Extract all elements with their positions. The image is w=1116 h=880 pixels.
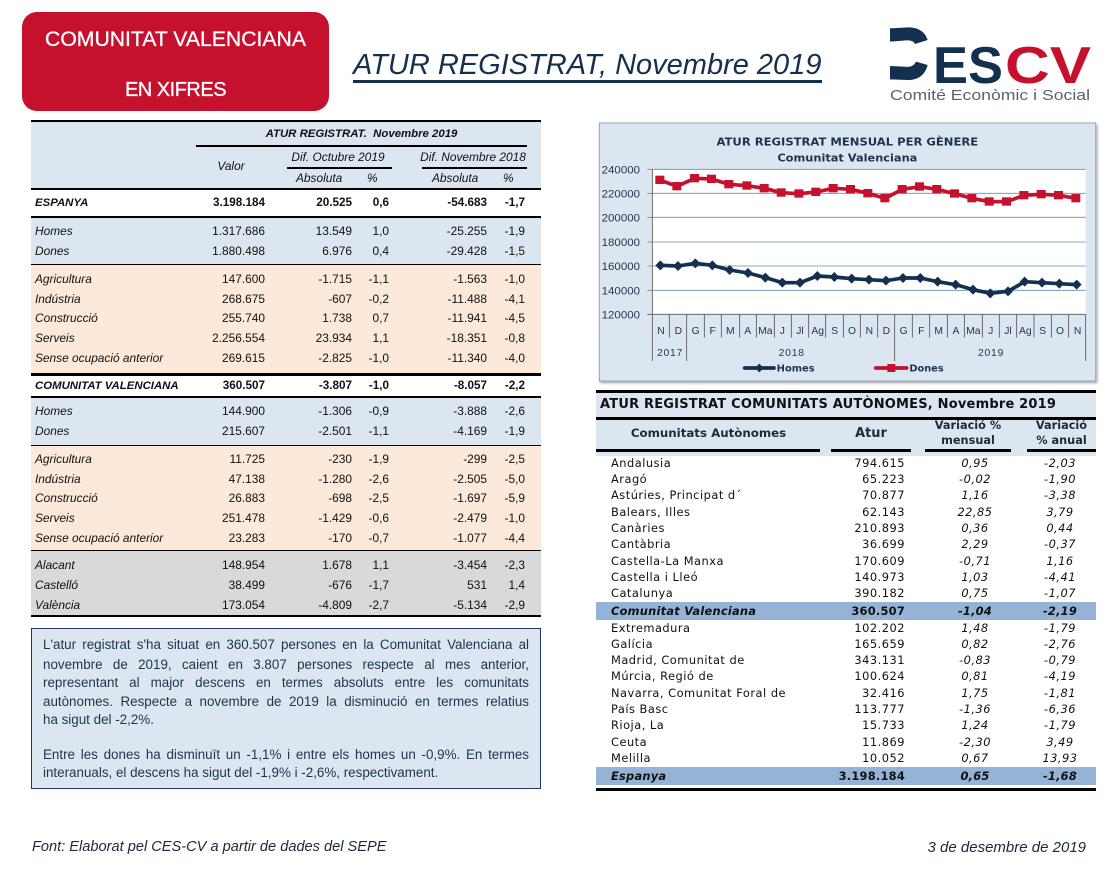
- panel: left table: Agricultura: [35, 272, 92, 286]
- right table rows: 22,85: [957, 505, 993, 519]
- x axis labels: F: [918, 326, 924, 337]
- left table header: [31, 120, 541, 190]
- panel: left table: -4,0: [504, 351, 525, 365]
- right table rows: 0,95: [961, 456, 989, 470]
- right table rows: 100.624: [854, 669, 905, 683]
- right table rows: -2,19: [1043, 604, 1077, 618]
- right table rows: 1,16: [961, 488, 989, 502]
- right table rows: -1,81: [1044, 686, 1076, 700]
- x axis labels: 2019: [978, 348, 1004, 359]
- x axis labels: 2017: [657, 348, 683, 359]
- panel: left table: -3.454: [453, 558, 487, 572]
- right table rows: 0,44: [1046, 521, 1074, 535]
- right table rows: -1,07: [1044, 586, 1076, 600]
- panel: left table: 148.954: [222, 558, 265, 572]
- logo: CESCV: ES: [933, 37, 1003, 95]
- panel: left table: -1,0: [368, 351, 389, 365]
- text block: paragraf 2: interanuals, el descens ha sigut del -1,9% i -2,6%, respectivament.: [43, 765, 438, 780]
- text block: paragraf 2: [43, 747, 529, 780]
- right table rows: -0,71: [959, 554, 991, 568]
- panel: left table: -2,6: [504, 404, 525, 418]
- legend: Dones: [909, 364, 944, 375]
- panel: left table: -1.429: [318, 511, 352, 525]
- panel: left table: -2,5: [368, 491, 389, 505]
- x axis labels: Jl: [796, 326, 804, 337]
- right table rows: -2,76: [1044, 637, 1076, 651]
- panel: left table: -4.809: [318, 598, 352, 612]
- x axis labels: N: [1074, 326, 1081, 337]
- right table rows: -4,19: [1044, 669, 1076, 683]
- right table rows: 15.733: [862, 718, 905, 732]
- x axis labels: [657, 326, 1081, 359]
- right table rows: 170.609: [854, 554, 905, 568]
- right table rows: Aragó: [611, 472, 647, 486]
- panel: left table: Indústria: [35, 472, 81, 486]
- panel: left table: -4.169: [453, 424, 487, 438]
- left table header: Absoluta: [296, 171, 342, 185]
- panel: left table: 144.900: [222, 404, 265, 418]
- panel: left table: 268.675: [222, 292, 265, 306]
- right table rows: 13,93: [1042, 751, 1078, 765]
- right table header: Variació: [1036, 419, 1087, 432]
- panel: left table: Sense ocupació anterior: [35, 351, 163, 365]
- panel: left table: -1,0: [504, 272, 525, 286]
- panel: left table: -1.563: [453, 272, 487, 286]
- x axis labels: S: [1039, 326, 1046, 337]
- logo: CESCV: CV: [1005, 37, 1091, 95]
- chart: atur registrat mensual per gènere: [598, 122, 1099, 385]
- right table rows: Espanya: [611, 769, 666, 783]
- panel: left table: -11.941: [448, 311, 487, 325]
- panel: left table: Sense ocupació anterior: [35, 531, 163, 545]
- right table rows: 1,75: [961, 686, 989, 700]
- panel: left table: -5,0: [504, 472, 525, 486]
- right table header: Atur: [855, 426, 887, 441]
- x axis labels: F: [710, 326, 716, 337]
- row: Espanya: [35, 196, 525, 209]
- panel: left table: 1.880.498: [212, 244, 265, 258]
- panel: left table: -5,9: [504, 491, 525, 505]
- panel: left table: -1.077: [453, 531, 487, 545]
- right table rows: 210.893: [854, 521, 905, 535]
- logo: CESCV: [890, 27, 1091, 104]
- chart title: [716, 136, 978, 165]
- panel: left table: -25.255: [447, 224, 487, 238]
- right table rows: 1,16: [1046, 554, 1074, 568]
- right table rows: -0,02: [959, 472, 991, 486]
- row: Comunitat Valenciana: -3.807: [319, 379, 352, 392]
- row: Comunitat Valenciana: -2,2: [505, 379, 525, 392]
- panel: left table: -0,2: [368, 292, 389, 306]
- row: Comunitat Valenciana: -1,0: [369, 379, 389, 392]
- x axis labels: Jl: [1004, 326, 1012, 337]
- right table rows: País Basc: [611, 702, 669, 716]
- panel: left table: -0,6: [368, 511, 389, 525]
- x axis labels: D: [675, 326, 682, 337]
- panel: left table: Dones: [35, 424, 69, 438]
- right table rows: 794.615: [854, 456, 905, 470]
- x axis labels: D: [883, 326, 890, 337]
- right table rows: 62.143: [862, 505, 905, 519]
- panel: left table: -11.340: [448, 351, 487, 365]
- x axis labels: Ma: [966, 326, 981, 337]
- row: Comunitat Valenciana: [35, 379, 525, 392]
- panel: left table: -1,1: [368, 272, 389, 286]
- rows: Comunitat Valenciana per sector: [31, 446, 541, 551]
- panel: left table: -0,9: [368, 404, 389, 418]
- panel: left table: -2.505: [453, 472, 487, 486]
- x axis labels: S: [831, 326, 838, 337]
- panel: left table: -3.888: [453, 404, 487, 418]
- right table rows: Cantàbria: [611, 537, 671, 551]
- legend: [745, 364, 944, 375]
- x axis labels: N: [657, 326, 665, 337]
- row: Espanya: -1,7: [505, 196, 525, 209]
- right table rows: Navarra, Comunitat Foral de: [611, 686, 786, 700]
- x axis labels: J: [988, 326, 993, 337]
- right table rows: -3,38: [1044, 488, 1076, 502]
- panel: left table: -1,9: [368, 452, 389, 466]
- x axis labels: A: [744, 326, 751, 337]
- panel: left table: Construcció: [35, 491, 98, 505]
- right table rows: Múrcia, Regió de: [611, 669, 714, 683]
- row: Comunitat Valenciana: 360.507: [223, 379, 265, 392]
- panel: left table: -230: [328, 452, 352, 466]
- panel: left table: -18.351: [447, 331, 487, 345]
- series: Homes: [655, 258, 1082, 298]
- right table rows: 165.659: [854, 637, 905, 651]
- x axis labels: G: [692, 326, 700, 337]
- badge: Comunitat Valenciana en xifres: COMUNITAT VALENCIANA: [45, 28, 306, 51]
- right table rows: 3,79: [1046, 505, 1074, 519]
- right table rows: Melilla: [611, 751, 651, 765]
- panel: left table: València: [35, 598, 80, 612]
- panel: left table: -2.479: [453, 511, 487, 525]
- left table header: Absoluta: [432, 171, 478, 185]
- panel: left table: -2,5: [504, 452, 525, 466]
- panel: left table: 6.976: [322, 244, 352, 258]
- panel: left table: 38.499: [229, 578, 265, 592]
- panel: left table: 13.549: [316, 224, 352, 238]
- panel: left table: -1,7: [368, 578, 389, 592]
- right table rows: 65.223: [862, 472, 905, 486]
- left table header: Valor: [217, 159, 245, 173]
- right table rows: Ceuta: [611, 735, 647, 749]
- right table rows: Extremadura: [611, 621, 691, 635]
- panel: left table: Homes: [35, 404, 73, 418]
- right table header: Comunitats Autònomes: [631, 426, 786, 440]
- left table header: %: [367, 171, 378, 185]
- panel: left table: Serveis: [35, 511, 75, 525]
- panel: left table: -4,4: [504, 531, 525, 545]
- footer: data: 3 de desembre de 2019: [928, 839, 1086, 856]
- x axis labels: O: [848, 326, 856, 337]
- right table rows: Comunitat Valenciana: [611, 604, 756, 618]
- text block: paragraf 1: L'atur registrat s'ha situat en 360.507 persones en la Comunitat Valenciana al: [43, 637, 529, 652]
- logo: CESCV: Comité Econòmic i Social: [890, 87, 1090, 104]
- panel: left table: 2.256.554: [212, 331, 265, 345]
- right table rows: -0,37: [1044, 537, 1076, 551]
- title: ATUR REGISTRAT, Novembre 2019: [353, 49, 821, 81]
- rows: Espanya per gènere: [31, 218, 541, 265]
- right table rows: 0,67: [961, 751, 989, 765]
- chart title: Comunitat Valenciana: [777, 153, 917, 165]
- right table rows: Astúries, Principat d´: [611, 488, 742, 502]
- panel: left table: 1.317.686: [212, 224, 265, 238]
- row: Espanya: 3.198.184: [213, 196, 265, 209]
- right table rows: Madrid, Comunitat de: [611, 653, 745, 667]
- right table rows: 10.052: [862, 751, 905, 765]
- text block: paragraf 1: novembre de 2019, caient en 3.807 persones respecte al mes anterior,: [43, 657, 529, 672]
- panel: left table: -4,5: [504, 311, 525, 325]
- panel: left table: 26.883: [229, 491, 265, 505]
- row: Espanya: ESPANYA: [35, 197, 88, 209]
- panel: left table: -2,6: [368, 472, 389, 486]
- right table rows: Canàries: [611, 521, 665, 535]
- right table rows: 390.182: [854, 586, 905, 600]
- badge: Comunitat Valenciana en xifres: EN XIFRES: [125, 79, 226, 101]
- right table rows: 343.131: [854, 653, 905, 667]
- y axis labels: 220000: [602, 188, 640, 200]
- right table rows: Rioja, La: [611, 718, 664, 732]
- right table rows: -1,68: [1043, 769, 1077, 783]
- text block: paragraf 1: representant al major descens en termes absoluts entre les comunitats: [43, 675, 529, 690]
- x axis labels: M: [934, 326, 943, 337]
- right table rows: 11.869: [862, 735, 905, 749]
- left table header: Dif. Octubre 2019: [291, 150, 385, 164]
- right table header: % anual: [1036, 434, 1087, 447]
- text box: comentari: [31, 628, 541, 789]
- y axis labels: 140000: [602, 285, 640, 297]
- panel: left table: -607: [328, 292, 352, 306]
- right table rows: Balears, Illes: [611, 505, 690, 519]
- right table rows: -4,41: [1044, 570, 1076, 584]
- right table rows: -1,79: [1044, 718, 1076, 732]
- panel: left table: -2,3: [504, 558, 525, 572]
- panel: left table: Alacant: [35, 558, 75, 572]
- panel: left table: Serveis: [35, 331, 75, 345]
- x axis labels: N: [866, 326, 873, 337]
- right table rows: 0,36: [961, 521, 989, 535]
- panel: left table: 1,4: [508, 578, 525, 592]
- row: Espanya: 20.525: [316, 196, 352, 209]
- right table header: ATUR REGISTRAT COMUNITATS AUTÒNOMES, Novembre 2019: [600, 397, 1056, 412]
- y axis labels: 180000: [602, 237, 640, 249]
- right table rows: 360.507: [851, 604, 905, 618]
- x axis labels: M: [726, 326, 735, 337]
- right table rows: 140.973: [854, 570, 905, 584]
- rows: Comunitat Valenciana per gènere: [31, 398, 541, 446]
- right table rows: 113.777: [854, 702, 905, 716]
- right table rows: Castella-La Manxa: [611, 554, 724, 568]
- right table header: mensual: [941, 434, 995, 447]
- panel: left table: 23.934: [316, 331, 352, 345]
- right table rows: 36.699: [862, 537, 905, 551]
- panel: left table: -2.501: [318, 424, 352, 438]
- panel: left table: Agricultura: [35, 452, 92, 466]
- panel: left table: -1.280: [318, 472, 352, 486]
- right table rows: -0,79: [1044, 653, 1076, 667]
- panel: left table: 0,7: [372, 311, 389, 325]
- footer: font: Font: Elaborat pel CES-CV a partir de dades del SEPE: [32, 839, 386, 855]
- right table rows: 3.198.184: [839, 769, 905, 783]
- plot area: [647, 169, 1086, 361]
- left table header: Dif. Novembre 2018: [420, 150, 526, 164]
- right table rows: 1,24: [961, 718, 989, 732]
- x axis labels: A: [953, 326, 960, 337]
- panel: left table: -2,7: [368, 598, 389, 612]
- panel: left table: -11.488: [448, 292, 487, 306]
- panel: left table: 0,4: [372, 244, 389, 258]
- right table rows: 2,29: [961, 537, 989, 551]
- x axis labels: O: [1056, 326, 1064, 337]
- panel: left table: 11.725: [230, 452, 265, 466]
- panel: left table: -0,7: [368, 531, 389, 545]
- rows: Espanya per sector: [31, 265, 541, 373]
- y axis labels: [602, 164, 640, 321]
- right table rows: 0,75: [961, 586, 989, 600]
- panel: left table: Construcció: [35, 311, 98, 325]
- row: Comunitat Valenciana: -8.057: [454, 379, 487, 392]
- panel: left table: [31, 120, 541, 617]
- panel: left table: 1,1: [372, 331, 389, 345]
- panel: left table: 1.738: [322, 311, 352, 325]
- left table header: %: [503, 171, 514, 185]
- panel: left table: 255.740: [222, 311, 265, 325]
- right table rows: 32.416: [862, 686, 905, 700]
- right table rows: 0,81: [961, 669, 989, 683]
- panel: left table: -1,0: [504, 511, 525, 525]
- right table rows: 70.877: [862, 488, 905, 502]
- panel: left table: -5.134: [453, 598, 487, 612]
- right table rows: -6,36: [1044, 702, 1076, 716]
- text block: paragraf 1: [43, 637, 529, 727]
- right table rows: 0,65: [960, 769, 990, 783]
- legend: Homes: [777, 364, 815, 375]
- panel: left table: 531: [467, 578, 487, 592]
- y axis labels: 160000: [602, 261, 640, 273]
- x axis labels: G: [900, 326, 908, 337]
- x axis labels: Ag: [1019, 326, 1032, 337]
- x axis labels: J: [780, 326, 785, 337]
- panel: left table: Homes: [35, 224, 73, 238]
- row: Comunitat Valenciana: COMUNITAT VALENCIANA: [35, 380, 179, 392]
- panel: left table: -1,1: [368, 424, 389, 438]
- panel: left table: 1.678: [322, 558, 352, 572]
- panel: left table: 215.607: [222, 424, 265, 438]
- panel: left table: -676: [328, 578, 352, 592]
- row: Espanya: -54.683: [447, 196, 487, 209]
- x axis labels: Ma: [758, 326, 773, 337]
- x axis labels: Ag: [811, 326, 824, 337]
- panel: left table: 173.054: [222, 598, 265, 612]
- text block: paragraf 2: Entre les dones ha disminuït un -1,1% i entre els homes un -0,9%. En termes: [43, 747, 529, 762]
- panel: left table: -4,1: [504, 292, 525, 306]
- panel: left table: 147.600: [222, 272, 265, 286]
- text block: paragraf 1: ha sigut del -2,2%.: [43, 712, 154, 727]
- right table rows: Castella i Lleó: [611, 570, 698, 584]
- right table rows: 102.202: [854, 621, 905, 635]
- panel: left table: 251.478: [222, 511, 265, 525]
- panel: left table: -0,8: [504, 331, 525, 345]
- panel: left table: Castelló: [35, 578, 78, 592]
- panel: left table: -29.428: [447, 244, 487, 258]
- x axis labels: 2018: [779, 348, 804, 359]
- right table rows: -1,36: [959, 702, 991, 716]
- panel: left table: -1,9: [504, 224, 525, 238]
- panel: left table: 1,1: [372, 558, 389, 572]
- right table rows: -1,90: [1044, 472, 1076, 486]
- row: Espanya: 0,6: [373, 196, 389, 209]
- panel: left table: -698: [328, 491, 352, 505]
- panel: left table: Indústria: [35, 292, 81, 306]
- right table rows: -2,03: [1044, 456, 1076, 470]
- right table header: [596, 390, 1096, 456]
- panel: left table: 47.138: [229, 472, 265, 486]
- right table rows: -1,04: [958, 604, 992, 618]
- right table rows: -1,79: [1044, 621, 1076, 635]
- right table rows: Galícia: [611, 637, 653, 651]
- rows: províncies: [31, 551, 541, 617]
- panel: left table: -299: [463, 452, 487, 466]
- right table rows: -2,30: [959, 735, 991, 749]
- panel: left table: -2,9: [504, 598, 525, 612]
- badge: Comunitat Valenciana en xifres: [22, 12, 329, 111]
- right table header: Variació %: [935, 419, 1001, 432]
- panel: right table: [596, 390, 1096, 456]
- left table header: ATUR REGISTRAT. Novembre 2019: [266, 128, 457, 140]
- panel: left table: 269.615: [222, 351, 265, 365]
- panel: left table: -170: [328, 531, 352, 545]
- panel: left table: -2.825: [318, 351, 352, 365]
- right table rows: -0,83: [959, 653, 991, 667]
- panel: left table: -1.715: [318, 272, 352, 286]
- right table rows: 3,49: [1046, 735, 1074, 749]
- panel: left table: -1.306: [318, 404, 352, 418]
- right table rows: [596, 456, 1096, 791]
- panel: left table: Dones: [35, 244, 69, 258]
- panel: left table: -1,9: [504, 424, 525, 438]
- right table rows: Catalunya: [611, 586, 673, 600]
- panel: left table: -1.697: [453, 491, 487, 505]
- series: Dones: [655, 174, 1080, 206]
- y axis labels: 200000: [602, 212, 640, 224]
- panel: left table: 23.283: [229, 531, 265, 545]
- right table rows: 1,03: [961, 570, 989, 584]
- panel: left table: -1,5: [504, 244, 525, 258]
- y axis labels: 120000: [602, 309, 640, 321]
- y axis labels: 240000: [602, 164, 640, 176]
- right table rows: 0,82: [961, 637, 989, 651]
- text block: paragraf 1: autònomes. Respecte a novembre de 2019 la disminució en termes relatius: [43, 694, 529, 709]
- right table rows: 1,48: [961, 621, 989, 635]
- chart title: ATUR REGISTRAT MENSUAL PER GÈNERE: [716, 136, 978, 149]
- panel: left table: 1,0: [372, 224, 389, 238]
- right table rows: Andalusia: [611, 456, 671, 470]
